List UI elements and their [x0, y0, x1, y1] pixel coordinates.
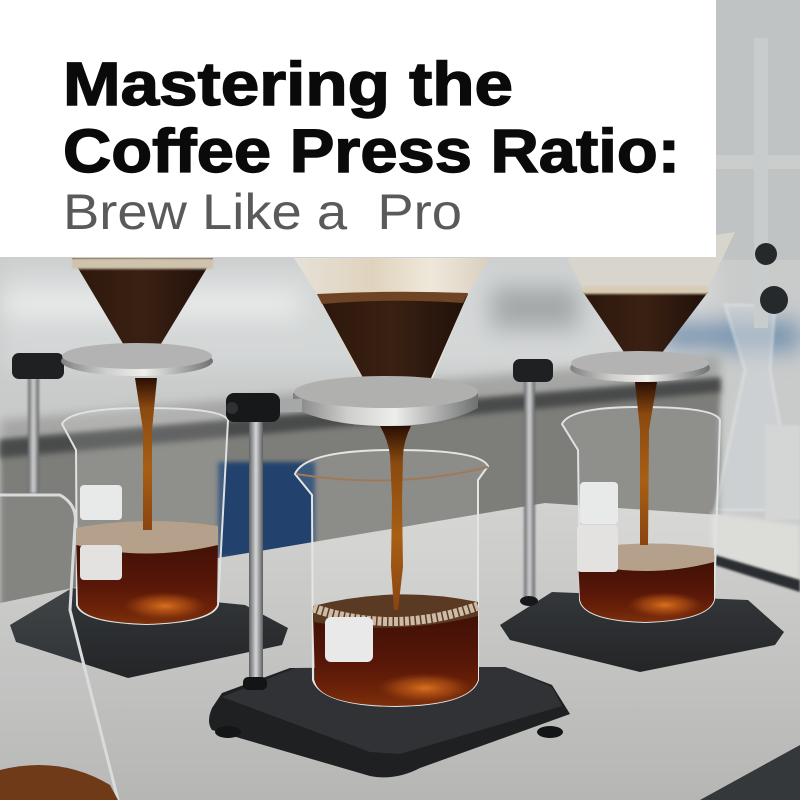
- center liquid glow: [377, 673, 473, 703]
- left stream: [135, 378, 157, 530]
- right clamp: [513, 359, 553, 382]
- center stand pole: [249, 422, 263, 680]
- left liquid glow: [123, 592, 207, 620]
- left foam: [76, 521, 218, 554]
- center coffee grounds: [317, 292, 468, 304]
- right stream: [635, 382, 657, 545]
- left pour-over station: [10, 258, 288, 678]
- foreground flask: [0, 495, 118, 800]
- right coffee cone: [583, 292, 708, 358]
- right beaker: [562, 407, 720, 622]
- left coffee cone: [72, 258, 213, 352]
- center pour-over station: [209, 258, 570, 777]
- right coffee liquid: [578, 558, 714, 622]
- center clamp: [226, 393, 302, 422]
- center steel ring: [293, 376, 478, 426]
- right pole foot: [520, 596, 538, 606]
- right pour-over station: [500, 232, 784, 672]
- right paper filter: [567, 232, 735, 355]
- right base plate: [500, 592, 784, 672]
- center base plate: [209, 667, 570, 777]
- left beaker: [62, 408, 228, 624]
- center beaker rim: [296, 467, 488, 481]
- right beaker labels: [580, 482, 618, 524]
- center foam: [313, 594, 478, 628]
- center beaker: [295, 450, 488, 706]
- title line 2: Coffee Press Ratio:: [63, 117, 680, 185]
- right steel ring: [570, 351, 710, 382]
- left steel ring: [61, 343, 213, 376]
- background flask right: [715, 305, 800, 520]
- title panel: [0, 0, 716, 257]
- counter top: [0, 503, 800, 800]
- background stand right: [716, 38, 800, 328]
- left clamp: [12, 353, 64, 379]
- right liquid glow: [627, 592, 703, 618]
- subtitle: Brew Like a Pro: [63, 184, 462, 240]
- left stand pole: [28, 378, 39, 493]
- center stream: [380, 426, 411, 610]
- center beaker label: [325, 617, 373, 662]
- center paper filter: [294, 258, 490, 385]
- left base plate: [10, 588, 288, 678]
- center coffee cone: [317, 294, 468, 385]
- center pole foot: [243, 677, 267, 690]
- right stand pole: [524, 380, 535, 600]
- left beaker labels: [80, 485, 122, 520]
- title line 1: Mastering the: [63, 50, 513, 118]
- left coffee liquid: [76, 538, 218, 624]
- right foam: [578, 543, 714, 571]
- center coffee liquid: [313, 612, 478, 706]
